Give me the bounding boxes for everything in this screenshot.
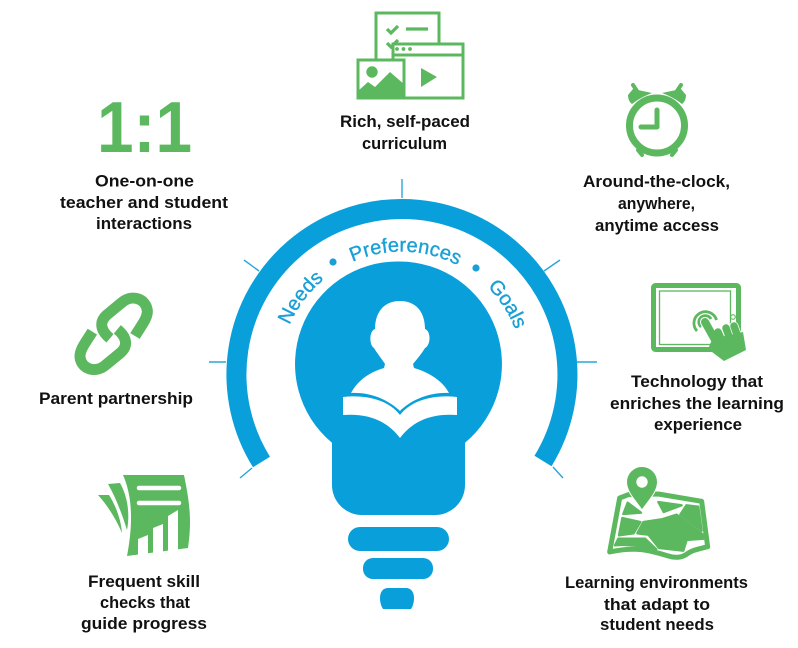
icon: one-to-one numeral: 1:1 (97, 88, 192, 168)
label: one-on-one (60, 172, 228, 233)
label: rich curriculum: Rich, self-paced (340, 112, 470, 131)
curved text: needs, preferences, goals: Goals (490, 280, 524, 328)
map sheet (610, 494, 708, 557)
icon: map with location pin (610, 466, 708, 557)
label: around the clock: anytime access (595, 216, 719, 235)
label: learning environments: that adapt to (604, 595, 710, 614)
icon: alarm clock (628, 85, 686, 155)
label: technology: Technology that (631, 372, 763, 391)
curved text: needs, preferences, goals (278, 238, 524, 328)
icon: chain link (80, 298, 147, 370)
label: learning environments (565, 573, 748, 634)
label: frequent skill checks: guide progress (81, 614, 207, 633)
label: frequent skill checks: Frequent skill (88, 572, 200, 591)
curved text: needs, preferences, goals: Needs (278, 272, 322, 324)
curved text: needs, preferences, goals: Preferences (348, 238, 461, 264)
label: frequent skill checks: checks that (100, 593, 190, 612)
label: learning environments: Learning environments (565, 573, 748, 592)
label: one-on-one: interactions (96, 214, 192, 233)
icon: curriculum documents and media (358, 13, 463, 99)
bulb body (295, 261, 502, 515)
icon: tablet with touching hand (654, 286, 746, 361)
label: around the clock: anywhere, (618, 194, 695, 213)
label: technology: enriches the learning (610, 394, 784, 413)
label: around the clock (583, 172, 730, 235)
label: parent partnership: Parent partnership (39, 389, 193, 408)
label: rich curriculum: curriculum (362, 134, 447, 153)
label: technology (610, 372, 784, 434)
label: one-on-one: One-on-one (95, 172, 194, 190)
icon: skill check report (98, 475, 190, 560)
location pin (626, 466, 658, 510)
label: rich curriculum (340, 112, 470, 153)
label: one-on-one: teacher and student (60, 193, 228, 212)
label: frequent skill checks (81, 572, 207, 633)
label: around the clock: Around-the-clock, (583, 172, 730, 191)
central lightbulb graphic (209, 179, 597, 609)
label: learning environments: student needs (600, 615, 714, 634)
person silhouette (351, 301, 449, 411)
arc ticks (209, 179, 597, 478)
open book (343, 396, 457, 438)
label: technology: experience (654, 415, 742, 434)
bulb arc (236, 209, 567, 462)
bulb base segments (348, 527, 449, 609)
